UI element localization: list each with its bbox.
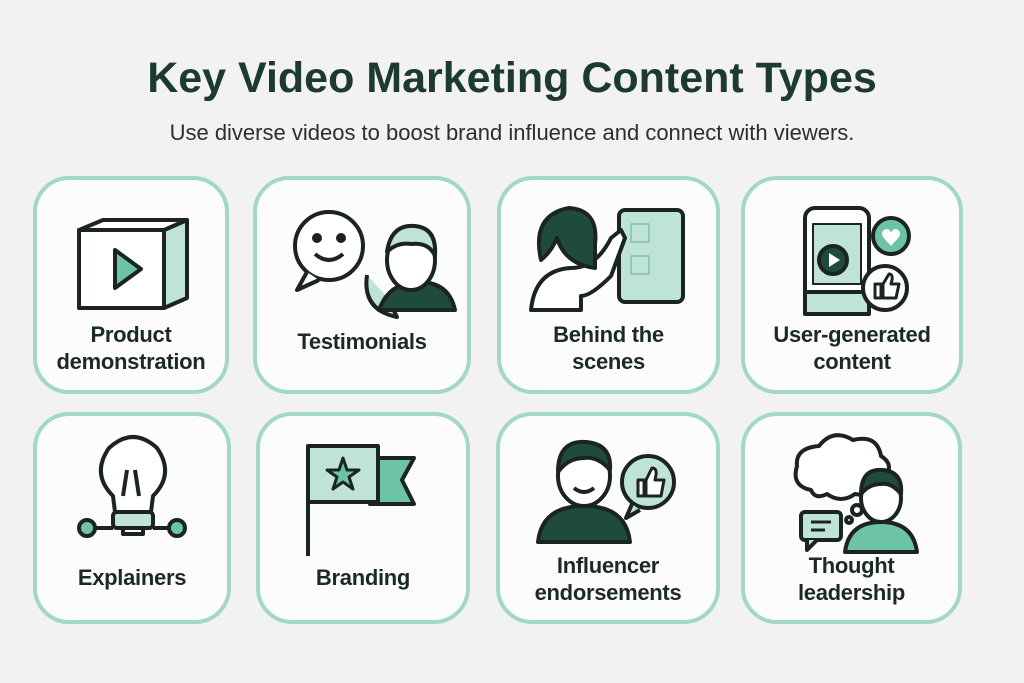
icon: video box bbox=[77, 218, 189, 310]
card: behind the scenes bbox=[497, 176, 720, 394]
label: leadership bbox=[798, 580, 905, 605]
card: testimonials bbox=[253, 176, 471, 394]
label: Branding bbox=[316, 565, 410, 590]
label: Behind the bbox=[553, 322, 664, 347]
label bbox=[798, 553, 905, 605]
label: Testimonials bbox=[297, 329, 427, 354]
label bbox=[535, 553, 681, 605]
label: Influencer bbox=[557, 553, 659, 578]
label: endorsements bbox=[535, 580, 681, 605]
card: branding bbox=[256, 412, 470, 624]
icon: person pointing at board bbox=[529, 206, 685, 312]
icon: flag with star bbox=[306, 444, 416, 556]
label bbox=[773, 322, 931, 374]
label: Thought bbox=[809, 553, 894, 578]
subtitle: Use diverse videos to boost brand influence and connect with viewers. bbox=[170, 120, 854, 145]
card: user-generated content bbox=[741, 176, 963, 394]
card: influencer endorsements bbox=[496, 412, 720, 624]
label bbox=[57, 322, 205, 374]
icon: speech bubble and person bbox=[293, 210, 457, 319]
icon: person with thumbs up bubble bbox=[536, 440, 676, 544]
card: thought leadership bbox=[741, 412, 962, 624]
label: Product bbox=[90, 322, 172, 347]
icon: thought cloud and person bbox=[794, 433, 919, 554]
label bbox=[553, 322, 664, 374]
label: demonstration bbox=[57, 349, 205, 374]
icon: phone with heart and like bbox=[803, 206, 911, 316]
label: scenes bbox=[572, 349, 645, 374]
title: Key Video Marketing Content Types bbox=[147, 54, 877, 102]
label: User-generated bbox=[773, 322, 931, 347]
card: product demonstration bbox=[33, 176, 229, 394]
icon: lightbulb bbox=[77, 434, 187, 538]
label: Explainers bbox=[78, 565, 186, 590]
card: explainers bbox=[33, 412, 231, 624]
label: content bbox=[813, 349, 891, 374]
